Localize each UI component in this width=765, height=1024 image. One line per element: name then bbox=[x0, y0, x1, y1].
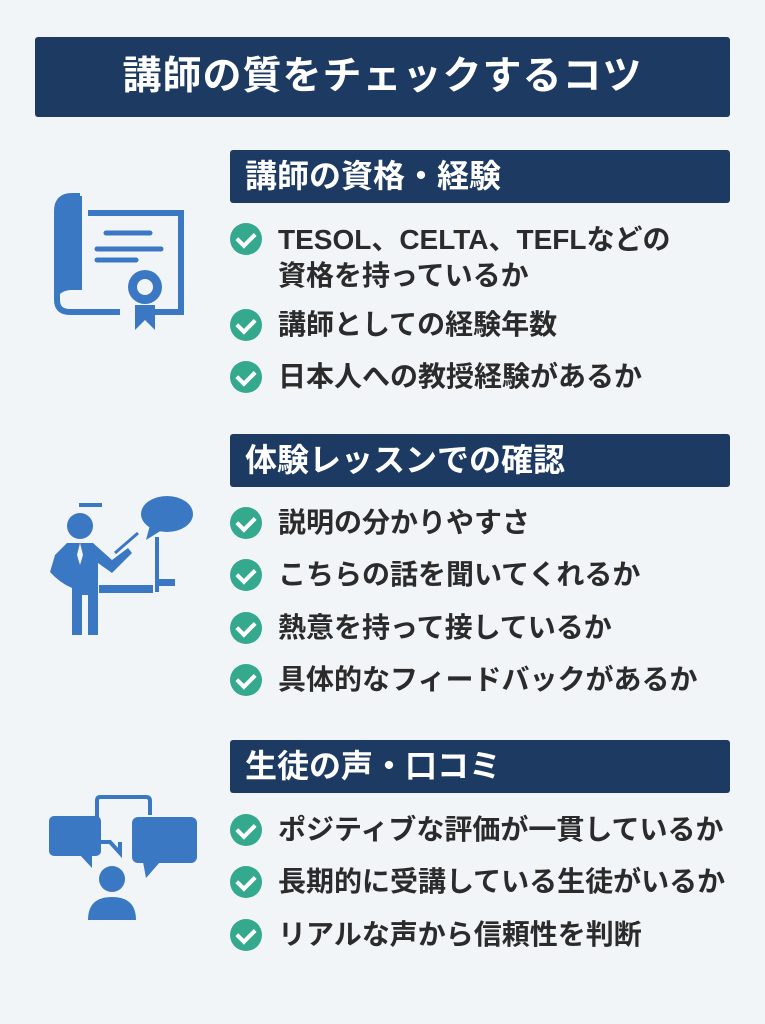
icon: certificate bbox=[54, 193, 184, 330]
item: 熱意を持って接しているか bbox=[278, 612, 612, 643]
item: 資格を持っているか bbox=[278, 260, 529, 291]
item: 講師としての経験年数 bbox=[278, 309, 557, 340]
item: こちらの話を聞いてくれるか bbox=[278, 559, 640, 590]
icon: reviews bbox=[49, 795, 197, 920]
item bbox=[230, 223, 670, 291]
item: ポジティブな評価が一貫しているか bbox=[278, 814, 723, 845]
icon: teacher bbox=[50, 496, 193, 635]
item: リアルな声から信頼性を判断 bbox=[278, 919, 642, 950]
item: 日本人への教授経験があるか bbox=[278, 361, 642, 392]
heading: reviews: 生徒の声・口コミ bbox=[245, 748, 501, 784]
heading: trial lesson bbox=[230, 434, 730, 487]
item: TESOL、CELTA、TEFLなどの bbox=[278, 224, 670, 255]
heading: trial lesson: 体験レッスンでの確認 bbox=[245, 442, 565, 478]
heading: qualifications bbox=[230, 150, 730, 203]
title bbox=[35, 37, 730, 117]
heading: qualifications: 講師の資格・経験 bbox=[245, 158, 501, 194]
item: 説明の分かりやすさ bbox=[278, 507, 530, 538]
heading: reviews bbox=[230, 740, 730, 793]
item: 具体的なフィードバックがあるか bbox=[278, 664, 697, 695]
item: 長期的に受講している生徒がいるか bbox=[278, 866, 725, 897]
title: 講師の質をチェックするコツ bbox=[122, 55, 642, 98]
